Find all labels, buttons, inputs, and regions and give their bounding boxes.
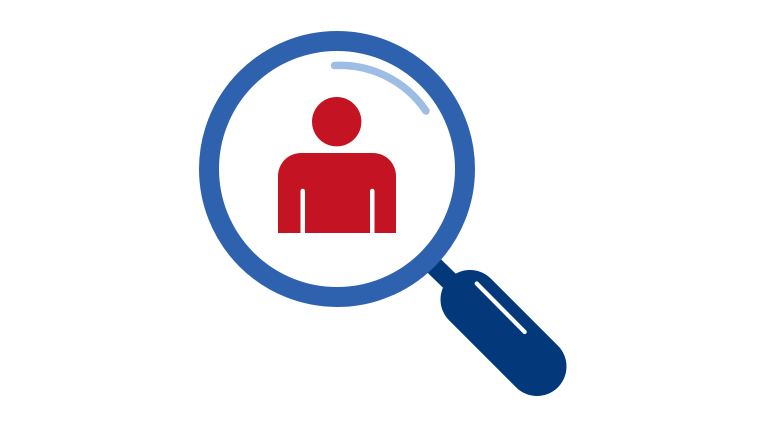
magnifying glass lens ring [209,41,465,297]
magnifying glass handle [426,258,537,366]
lens glare highlight [334,65,426,111]
icon: person [278,97,396,233]
